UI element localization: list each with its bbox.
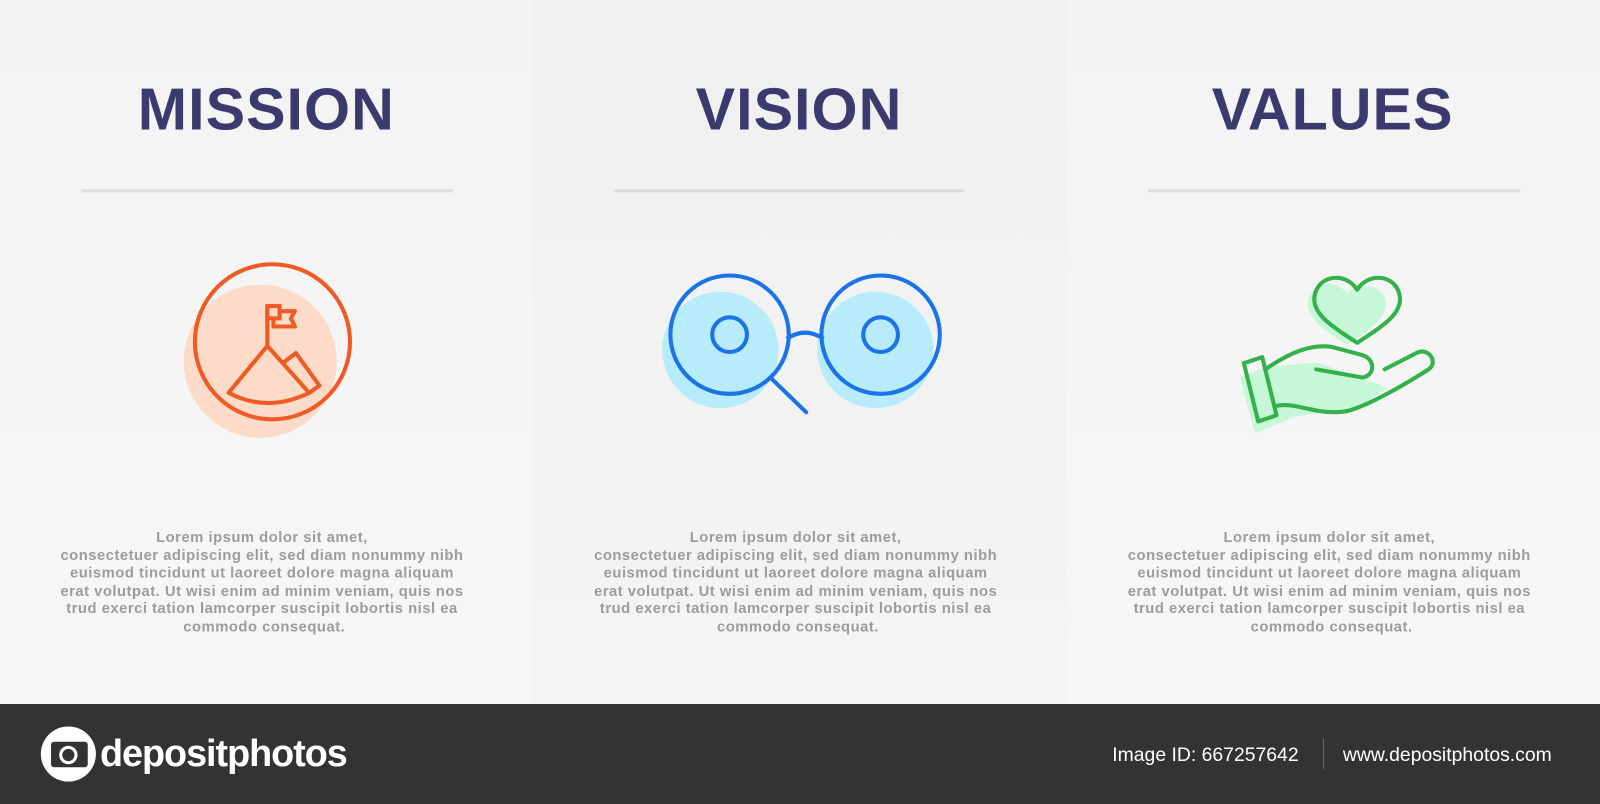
heading: values: VALUES	[1212, 76, 1454, 143]
panel: values background	[1066, 0, 1600, 704]
text block: values: commodo consequat.	[1251, 620, 1413, 636]
icon: mountain flag	[184, 264, 350, 438]
icon: binoculars	[662, 275, 940, 412]
footer	[0, 704, 1600, 804]
text block: values: consectetuer adipiscing elit, sed diam nonummy nibh	[1128, 548, 1531, 564]
panel: vision background	[533, 0, 1066, 704]
text block: values: Lorem ipsum dolor sit amet,	[1223, 530, 1435, 546]
text block: values: trud exerci tation lamcorper suscipit lobortis nisl ea	[1134, 601, 1525, 617]
heading: mission: MISSION	[138, 76, 395, 143]
text block: vision: euismod tincidunt ut laoreet dolore magna aliquam	[604, 565, 988, 581]
text block: values: erat volutpat. Ut wisi enim ad minim veniam, quis nos	[1128, 584, 1531, 600]
panel: values	[1128, 76, 1536, 636]
logo text: depositphotos	[100, 732, 347, 774]
panel: vision	[594, 76, 1002, 636]
text block: vision: erat volutpat. Ut wisi enim ad minim veniam, quis nos	[594, 584, 997, 600]
text block: vision: commodo consequat.	[717, 620, 879, 636]
text block: vision: Lorem ipsum dolor sit amet,	[690, 530, 902, 546]
website: www.depositphotos.com	[1342, 744, 1552, 766]
text block: mission: euismod tincidunt ut laoreet dolore magna aliquam	[70, 565, 454, 581]
text block: values: euismod tincidunt ut laoreet dolore magna aliquam	[1137, 565, 1521, 581]
text block: vision: trud exerci tation lamcorper suscipit lobortis nisl ea	[600, 601, 992, 617]
text block: mission: commodo consequat.	[183, 620, 345, 636]
panel: mission	[60, 76, 468, 636]
text block: mission: trud exerci tation lamcorper suscipit lobortis nisl ea	[66, 601, 458, 617]
icon: camera logo	[41, 726, 96, 782]
heading: vision: VISION	[696, 76, 902, 143]
text block: mission: Lorem ipsum dolor sit amet,	[156, 530, 368, 546]
text block: mission: erat volutpat. Ut wisi enim ad minim veniam, quis nos	[60, 584, 464, 600]
text block: vision: consectetuer adipiscing elit, sed diam nonummy nibh	[594, 548, 997, 564]
image id: Image ID: 667257642	[1112, 744, 1299, 766]
panel: mission background	[0, 0, 533, 704]
icon: hand with heart	[1240, 278, 1433, 434]
text block: mission: consectetuer adipiscing elit, sed diam nonummy nibh	[60, 548, 463, 564]
